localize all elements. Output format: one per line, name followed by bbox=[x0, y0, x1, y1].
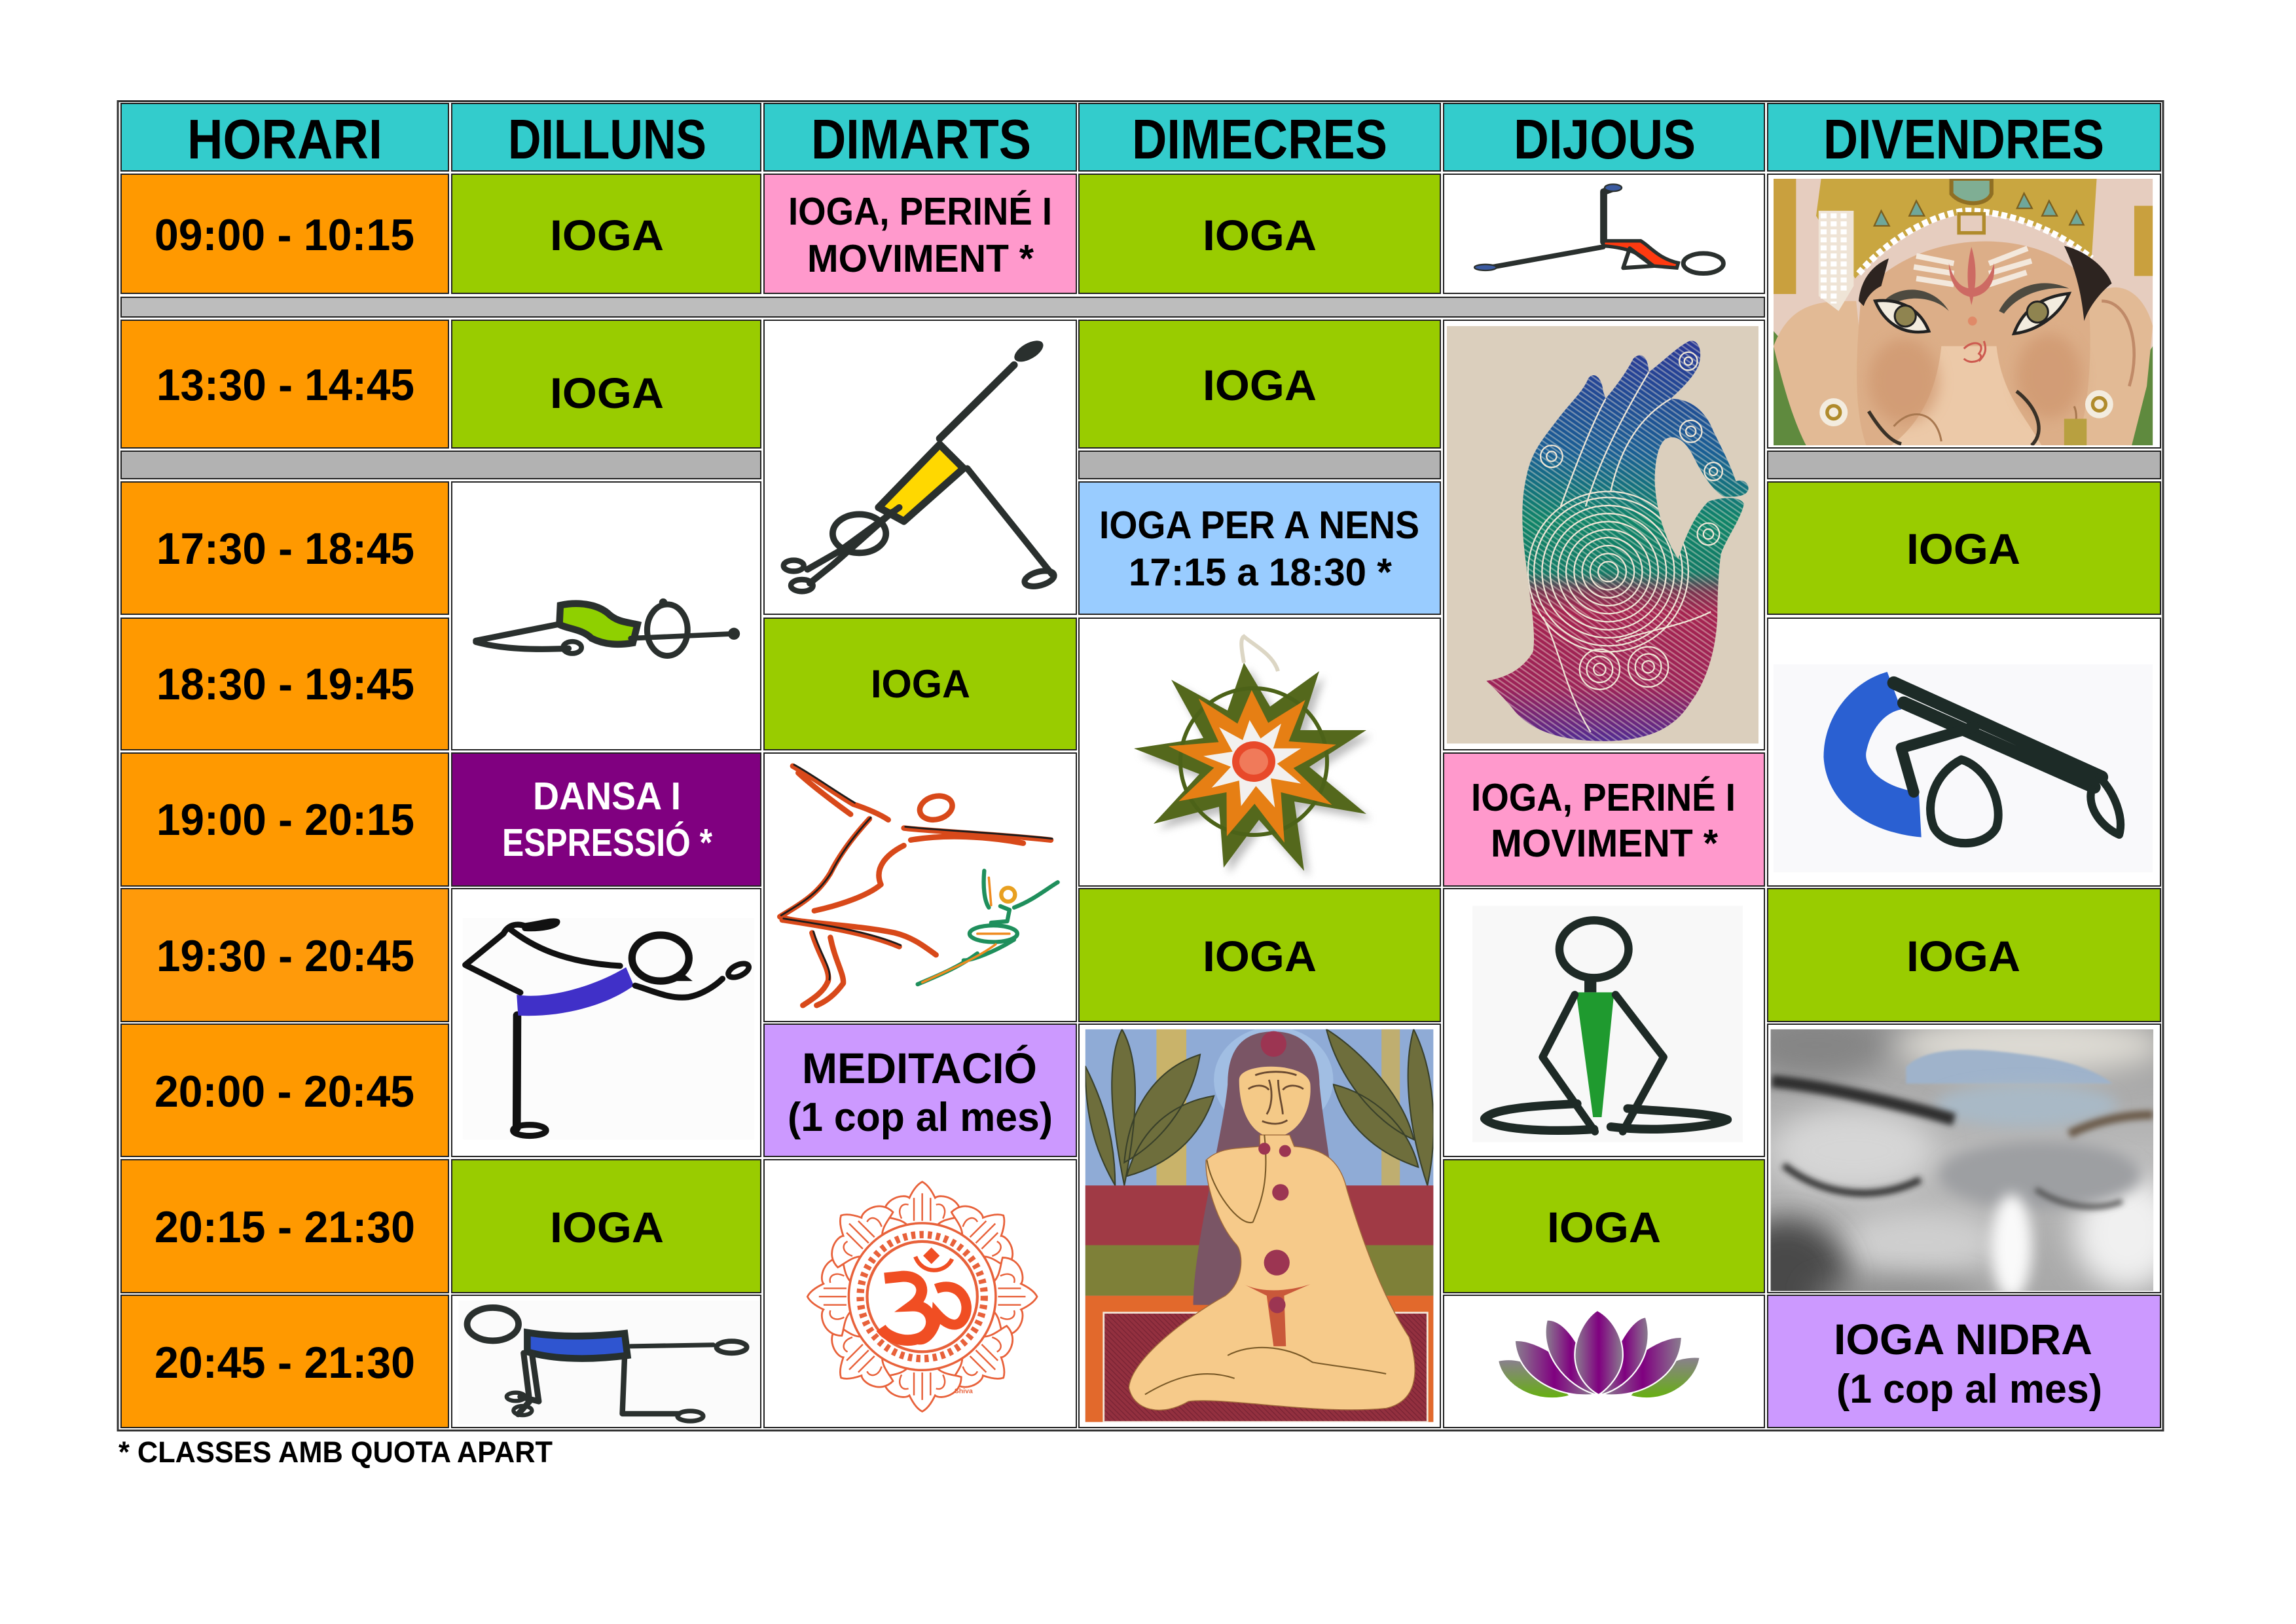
class: IOGA NIDRA (1 cop al mes) bbox=[1768, 1295, 2160, 1428]
class: IOGA bbox=[1079, 174, 1440, 293]
class: MEDITACIÓ (1 cop al mes) bbox=[764, 1024, 1076, 1156]
image cell: table pose, blue torso bbox=[452, 1295, 761, 1428]
time 13:30 - 14:45 bbox=[121, 320, 448, 448]
class: IOGA bbox=[452, 320, 761, 448]
class: MEDITACIÓ (1 cop al mes): (1 cop al mes) bbox=[788, 1095, 1053, 1140]
heading: DIMECRES: DIMECRES bbox=[1132, 109, 1387, 171]
column: dijous bbox=[1444, 174, 1764, 1428]
heading: HORARI bbox=[121, 103, 448, 171]
heading: DILLUNS: DILLUNS bbox=[508, 109, 706, 171]
class: IOGA PER A NENS bbox=[1079, 482, 1440, 614]
heading: DIVENDRES: DIVENDRES bbox=[1823, 109, 2104, 171]
time 19:00 - 20:15: 19:00 - 20:15 bbox=[156, 795, 414, 845]
time 20:00 - 20:45 bbox=[121, 1024, 448, 1156]
break band wednesday bbox=[1079, 451, 1440, 479]
image cell: seated pose, green torso bbox=[1444, 889, 1764, 1156]
class: IOGA: IOGA bbox=[550, 1203, 664, 1251]
heading: DIJOUS bbox=[1444, 103, 1764, 171]
header row bbox=[121, 103, 2160, 171]
image cell: om mandala: Shiva bbox=[955, 1387, 973, 1395]
image cell: om mandala bbox=[764, 1160, 1076, 1428]
class: IOGA bbox=[1079, 320, 1440, 448]
column: dilluns bbox=[452, 174, 761, 1428]
class: IOGA bbox=[1768, 482, 2160, 614]
time 18:30 - 19:45 bbox=[121, 618, 448, 750]
class: IOGA: IOGA bbox=[550, 369, 664, 417]
class: IOGA bbox=[1768, 889, 2160, 1022]
image cell: plough pose, blue torso bbox=[1768, 618, 2160, 886]
image cell: prone pose, green torso bbox=[452, 482, 761, 750]
class: IOGA NIDRA (1 cop al mes): (1 cop al mes) bbox=[1836, 1367, 2102, 1412]
class: IOGA: IOGA bbox=[550, 211, 664, 259]
image cell: hand mudra mandala bbox=[1444, 320, 1764, 750]
time 20:15 - 21:30 bbox=[121, 1160, 448, 1293]
time 20:45 - 21:30 bbox=[121, 1295, 448, 1428]
time 20:45 - 21:30: 20:45 - 21:30 bbox=[155, 1338, 415, 1388]
image cell: seated yogi painting bbox=[1079, 1024, 1440, 1428]
column: divendres bbox=[1767, 174, 2161, 1428]
class: IOGA bbox=[1079, 889, 1440, 1022]
class: IOGA, PERINÉ I MOVIMENT bbox=[764, 174, 1076, 293]
class: IOGA bbox=[452, 1160, 761, 1293]
time 19:00 - 20:15 bbox=[121, 753, 448, 886]
image cell: woven star bbox=[1079, 618, 1440, 886]
class: IOGA PER A NENS: IOGA PER A NENS bbox=[1099, 504, 1419, 547]
column: dimecres bbox=[1079, 174, 1440, 1428]
class: IOGA, PERINÉ I MOVIMENT: MOVIMENT * bbox=[1491, 822, 1718, 865]
heading: HORARI: HORARI bbox=[187, 109, 382, 171]
break band left bbox=[121, 451, 761, 479]
class: IOGA: IOGA bbox=[871, 662, 970, 706]
heading: DIJOUS: DIJOUS bbox=[1514, 109, 1696, 171]
class: IOGA, PERINÉ I MOVIMENT bbox=[1444, 753, 1764, 886]
image cell: lotus bbox=[1444, 1295, 1764, 1428]
time 19:30 - 20:45 bbox=[121, 889, 448, 1022]
time 17:30 - 18:45 bbox=[121, 482, 448, 614]
column: dimarts bbox=[764, 174, 1076, 1428]
image cell: dancers bbox=[764, 753, 1076, 1022]
class: IOGA, PERINÉ I MOVIMENT: MOVIMENT * bbox=[807, 237, 1034, 280]
time 09:00 - 10:15 bbox=[121, 174, 448, 293]
time 18:30 - 19:45: 18:30 - 19:45 bbox=[156, 659, 414, 709]
class: IOGA, PERINÉ I MOVIMENT: IOGA, PERINÉ I bbox=[788, 190, 1052, 233]
time 19:30 - 20:45: 19:30 - 20:45 bbox=[156, 931, 414, 981]
class: DANSA I ESPRESSIÓ bbox=[452, 753, 761, 886]
class: IOGA: IOGA bbox=[1906, 525, 2020, 573]
table outer border bbox=[118, 101, 2163, 1430]
class: IOGA: IOGA bbox=[1203, 932, 1317, 980]
image cell: side plank, red torso bbox=[1444, 174, 1764, 293]
break band friday bbox=[1768, 451, 2160, 479]
time 09:00 - 10:15: 09:00 - 10:15 bbox=[155, 210, 414, 260]
class: IOGA bbox=[764, 618, 1076, 750]
class: IOGA: IOGA bbox=[1547, 1203, 1661, 1251]
class: IOGA bbox=[452, 174, 761, 293]
time 13:30 - 14:45: 13:30 - 14:45 bbox=[156, 360, 414, 410]
time column bbox=[121, 174, 448, 1428]
image cell: standing balance pose, blue torso bbox=[452, 889, 761, 1156]
class: IOGA: IOGA bbox=[1906, 932, 2020, 980]
time 20:00 - 20:45: 20:00 - 20:45 bbox=[155, 1067, 414, 1116]
class: IOGA bbox=[1444, 1160, 1764, 1293]
image cell: closed eyes with iceberg photo bbox=[1767, 1024, 2161, 1293]
footnote: * CLASSES AMB QUOTA APART bbox=[118, 1435, 553, 1469]
class: DANSA I ESPRESSIÓ: DANSA I bbox=[533, 775, 681, 818]
class: IOGA, PERINÉ I MOVIMENT: IOGA, PERINÉ I bbox=[1471, 776, 1736, 819]
time 17:30 - 18:45: 17:30 - 18:45 bbox=[156, 524, 414, 574]
image cell: Ganesha painting bbox=[1768, 174, 2160, 448]
time 20:15 - 21:30: 20:15 - 21:30 bbox=[155, 1202, 415, 1252]
class: IOGA PER A NENS: 17:15 a 18:30 * bbox=[1129, 551, 1392, 594]
heading: DIMARTS: DIMARTS bbox=[811, 109, 1031, 171]
class: IOGA: IOGA bbox=[1203, 211, 1317, 259]
class: IOGA NIDRA (1 cop al mes): IOGA NIDRA bbox=[1834, 1315, 2092, 1363]
class: IOGA: IOGA bbox=[1203, 361, 1317, 409]
image cell: downward dog, yellow torso bbox=[764, 320, 1076, 614]
class: DANSA I ESPRESSIÓ: ESPRESSIÓ * bbox=[502, 821, 712, 864]
break band after morning bbox=[121, 297, 1764, 317]
class: MEDITACIÓ (1 cop al mes): MEDITACIÓ bbox=[802, 1044, 1037, 1092]
